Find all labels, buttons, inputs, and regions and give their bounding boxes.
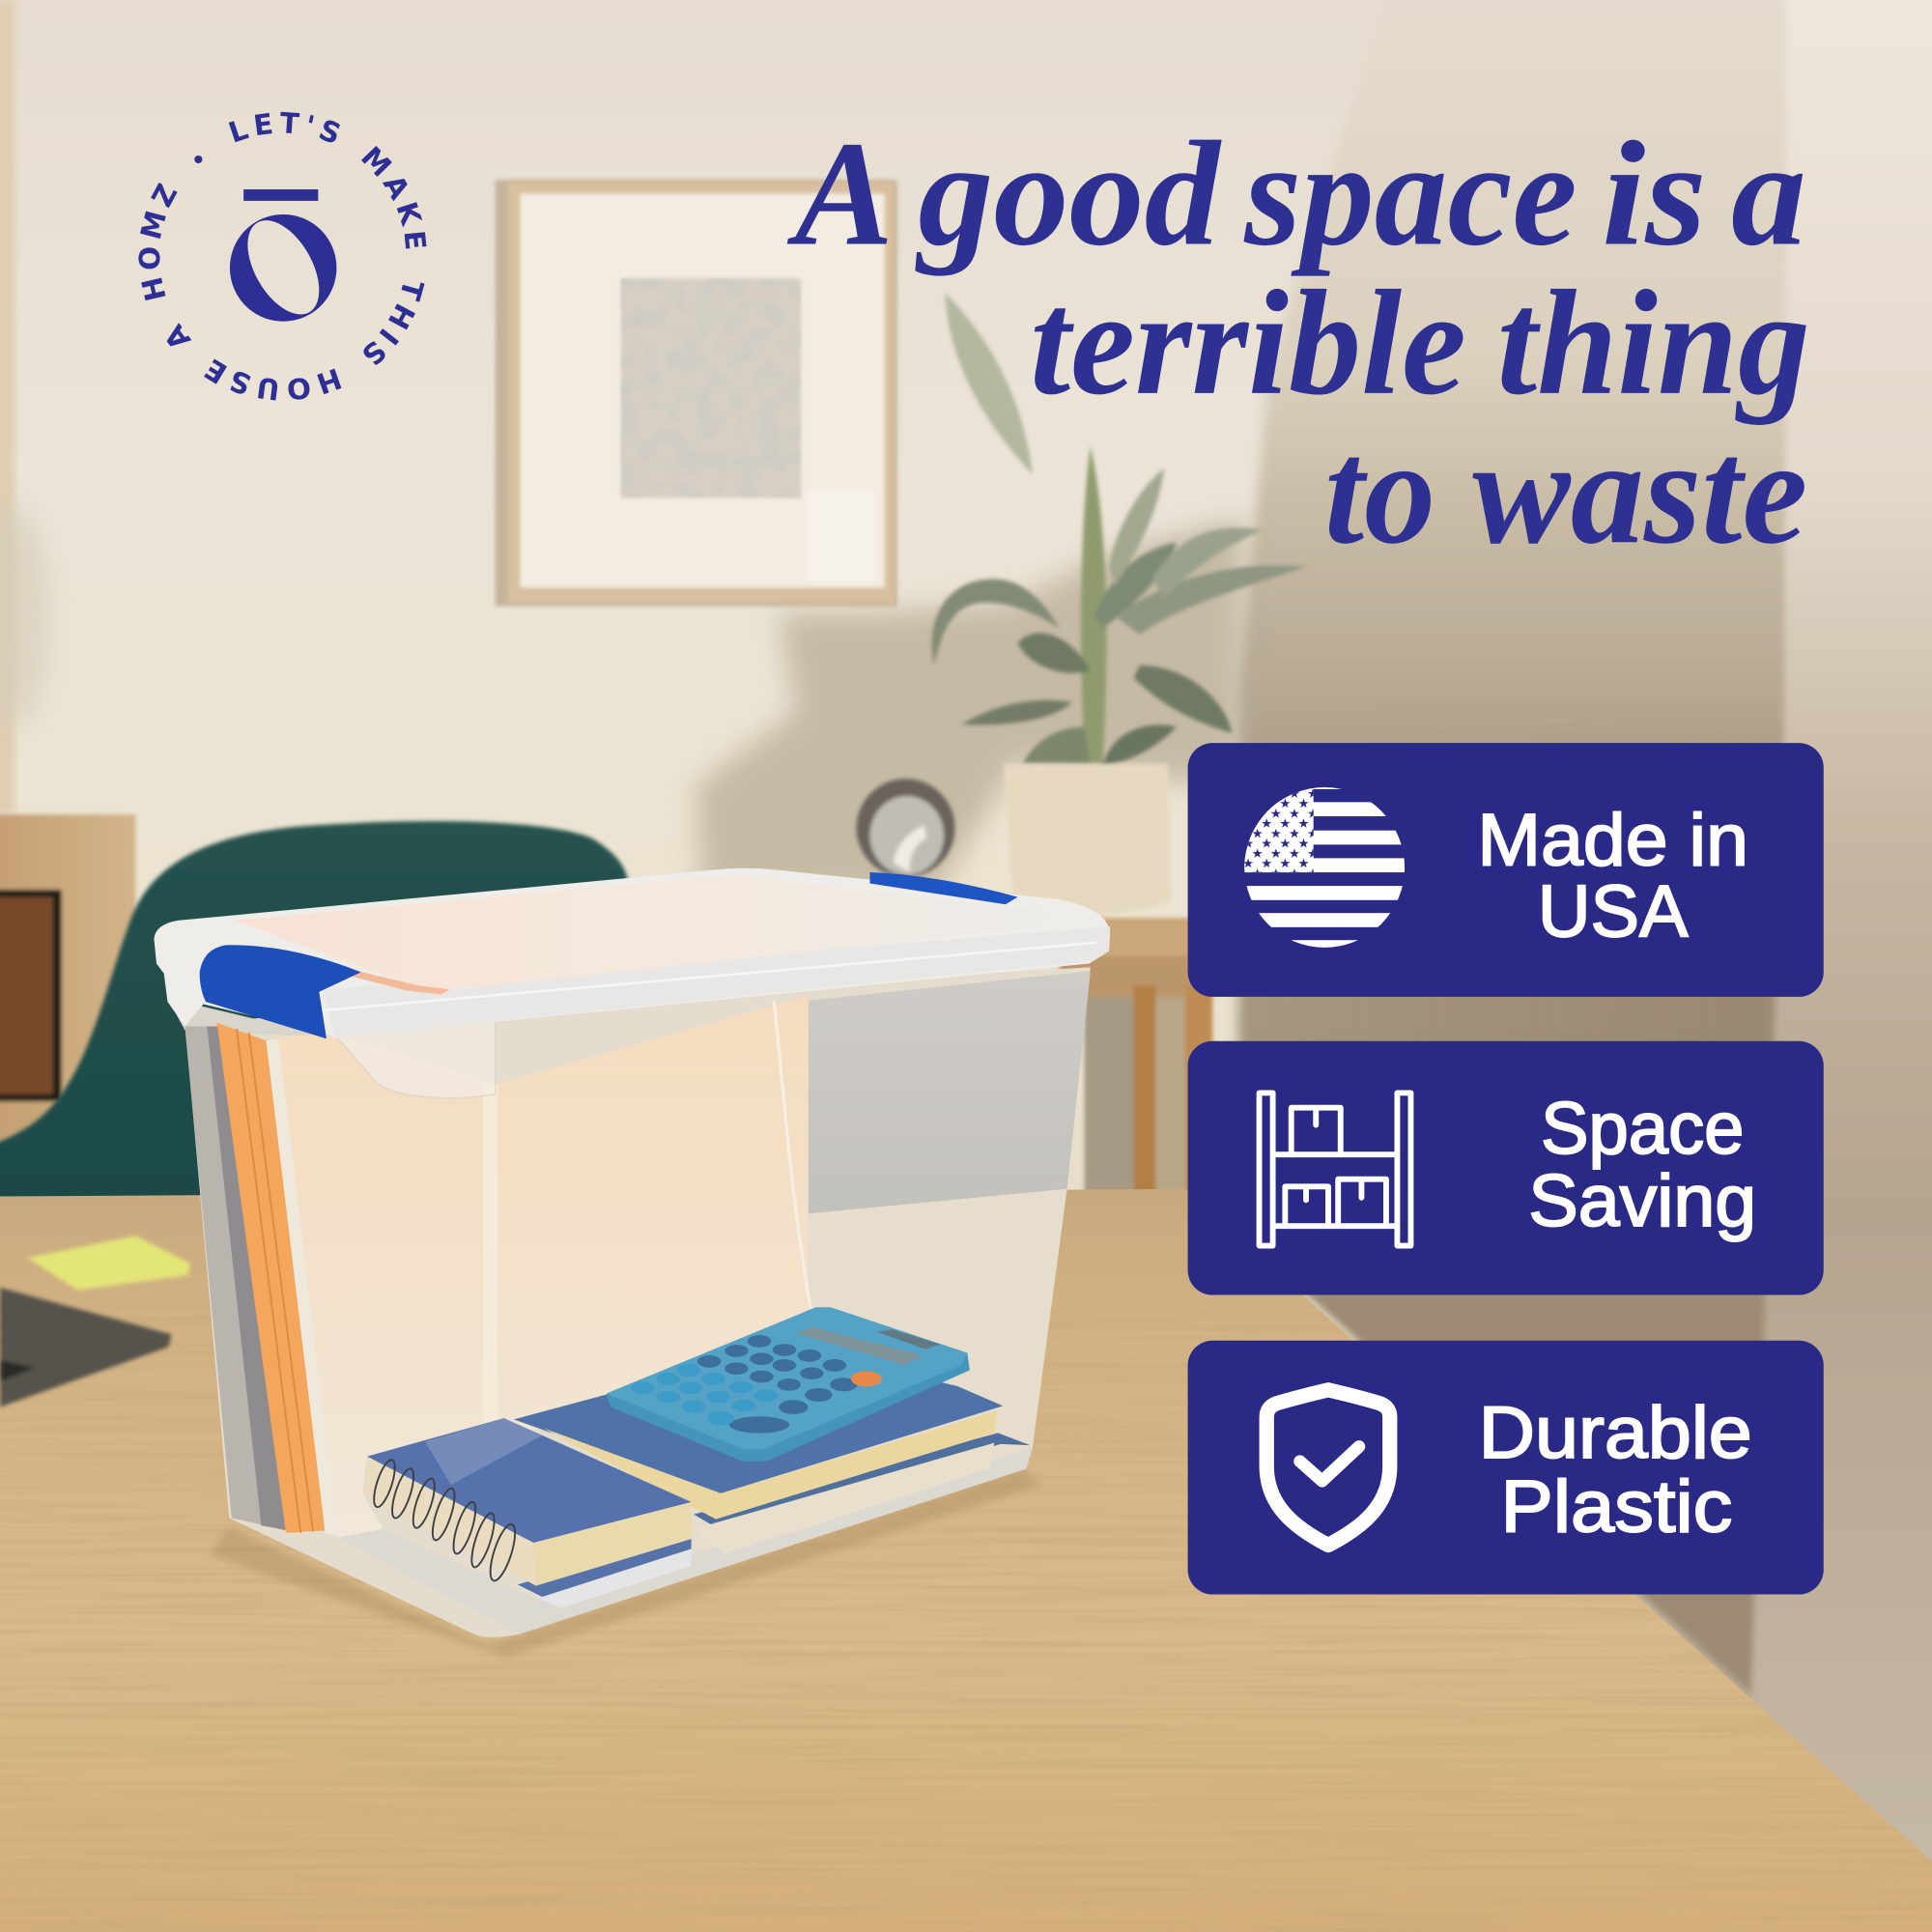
table seen through box	[690, 1189, 1067, 1552]
dark sheet	[185, 1026, 286, 1530]
label	[1479, 1392, 1752, 1548]
icon: shield with check	[1266, 1390, 1390, 1545]
blurred plant	[932, 294, 1306, 766]
laptop	[0, 1288, 171, 1407]
wooden table top	[0, 1189, 1932, 1932]
headline: space	[1243, 110, 1577, 277]
plant leaves	[945, 294, 1106, 764]
card: Durable Plastic	[1188, 1341, 1824, 1595]
bottom white book	[533, 1548, 692, 1608]
label: Space	[1541, 1088, 1744, 1170]
notebook spiral rings	[370, 1458, 520, 1583]
side table	[1060, 918, 1213, 1195]
upper book	[514, 1346, 1003, 1520]
slogan dot	[194, 156, 202, 163]
orange folder	[216, 1023, 330, 1533]
logo badge	[138, 112, 427, 400]
paper right edge	[774, 1001, 810, 1309]
box floor	[337, 1448, 1033, 1634]
label: Plastic	[1501, 1465, 1732, 1548]
desk clock	[856, 779, 955, 877]
circular slogan: LET'S MAKE THIS HOUSE A HOMZ	[138, 112, 427, 400]
headline: to	[1324, 408, 1435, 575]
headline: thing	[1497, 259, 1810, 426]
headline: is	[1602, 110, 1707, 277]
calculator keys	[631, 1335, 882, 1434]
box body	[185, 967, 1091, 1637]
box corner handle	[332, 1020, 496, 1098]
headline: terrible	[1030, 259, 1466, 426]
cream paper	[278, 996, 809, 1538]
sticky note	[27, 1236, 189, 1290]
headline: A	[786, 110, 894, 277]
lid	[154, 868, 1110, 1037]
paper center band	[483, 1084, 497, 1430]
plant pot	[1005, 764, 1171, 915]
label: Durable	[1479, 1392, 1752, 1474]
green chair	[0, 821, 629, 1208]
white sheets	[267, 1035, 348, 1537]
calculator	[607, 1307, 970, 1462]
left cabinet	[0, 814, 135, 1148]
icon: shelf with boxes	[1260, 1093, 1410, 1246]
left blue clip	[200, 945, 361, 1038]
logo mark: o with macron	[230, 189, 336, 322]
right blue clip	[870, 872, 1018, 904]
label	[1477, 799, 1748, 952]
icon: US flag	[1238, 784, 1410, 950]
upper-left rim fill	[167, 998, 332, 1037]
framed picture	[496, 180, 897, 607]
headline: waste	[1472, 408, 1807, 575]
label: Saving	[1528, 1160, 1756, 1242]
grey reflection on right panel	[809, 971, 1091, 1213]
card: Made in USA	[1188, 743, 1824, 997]
label: USA	[1538, 870, 1688, 952]
box shadow	[210, 1468, 1041, 1658]
headline: good	[915, 110, 1222, 277]
lower book	[694, 1433, 1030, 1553]
headline	[786, 110, 1810, 575]
label	[1528, 1088, 1756, 1242]
spiral notebook	[362, 1418, 692, 1597]
label: Made in	[1477, 799, 1748, 881]
card: Space Saving	[1188, 1041, 1824, 1295]
storage box	[154, 868, 1110, 1658]
headline: a	[1731, 110, 1806, 277]
